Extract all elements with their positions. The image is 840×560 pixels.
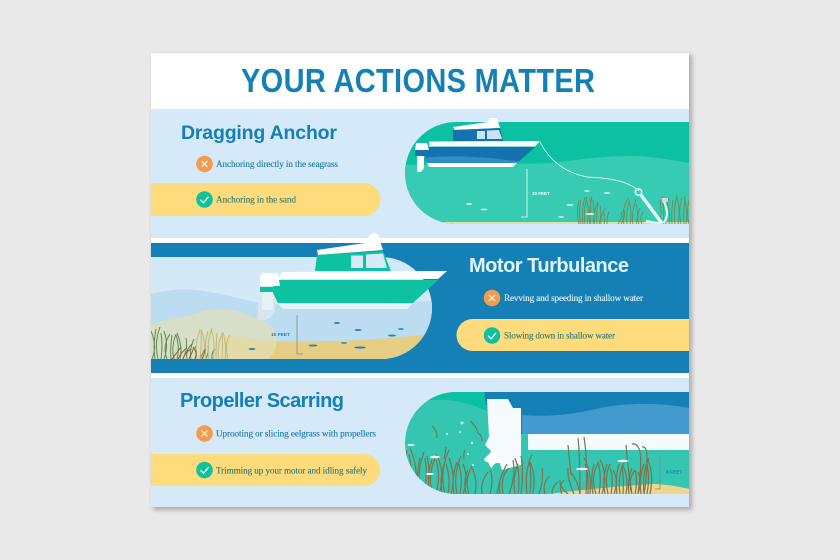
bubbles and fish [446, 422, 474, 466]
text: bad motor use: Revving and speeding in shallow water [504, 293, 643, 303]
depth marker [521, 169, 550, 217]
anchor [635, 189, 668, 223]
boat [260, 233, 447, 310]
scene: propeller in eelgrass [400, 390, 690, 496]
heading: propeller scarring: Propeller Scarring [180, 390, 344, 412]
depth marker [655, 456, 682, 489]
icon: orange x [196, 156, 213, 172]
depth marker [271, 315, 303, 354]
depth marker: 30 FEET [532, 191, 550, 196]
poster board [151, 53, 689, 507]
good practice pill [456, 319, 689, 351]
good practice pill: Trimming up your motor and idling safely [216, 466, 367, 476]
panel: motor turbulance [150, 233, 689, 373]
scene: boat stirring sediment [150, 255, 440, 362]
good practice pill: Slowing down in shallow water [504, 330, 615, 340]
depth marker: 10 FEET [271, 332, 290, 338]
propeller [484, 448, 501, 468]
fish [248, 322, 404, 350]
depth marker: 6 FEET [666, 470, 682, 476]
icon: orange x [196, 425, 213, 442]
panel: propeller scarring [151, 378, 690, 507]
panel: dragging anchor [151, 109, 690, 238]
sand [548, 484, 689, 494]
heading: motor turbulance: Motor Turbulance [469, 255, 629, 277]
boat [415, 118, 540, 172]
turbulence cloud [150, 309, 276, 362]
good practice pill [151, 454, 380, 486]
scene: boat anchored in sand [400, 120, 690, 226]
icon: orange x [484, 290, 500, 306]
seagrass [578, 195, 689, 224]
good practice pill: Anchoring in the sand [216, 194, 296, 204]
hull close-up [484, 391, 690, 450]
seagrass [150, 327, 230, 359]
heading: dragging anchor: Dragging Anchor [181, 122, 337, 144]
motor [485, 399, 521, 470]
eelgrass [405, 421, 652, 494]
text: bad propeller use: Uprooting or slicing eelgrass with propellers [216, 428, 376, 438]
fish [466, 190, 610, 218]
title: YOUR ACTIONS MATTER [241, 62, 595, 99]
text: bad anchoring: Anchoring directly in the seagrass [216, 159, 338, 169]
good practice pill [151, 183, 380, 216]
anchor rope [540, 142, 639, 191]
